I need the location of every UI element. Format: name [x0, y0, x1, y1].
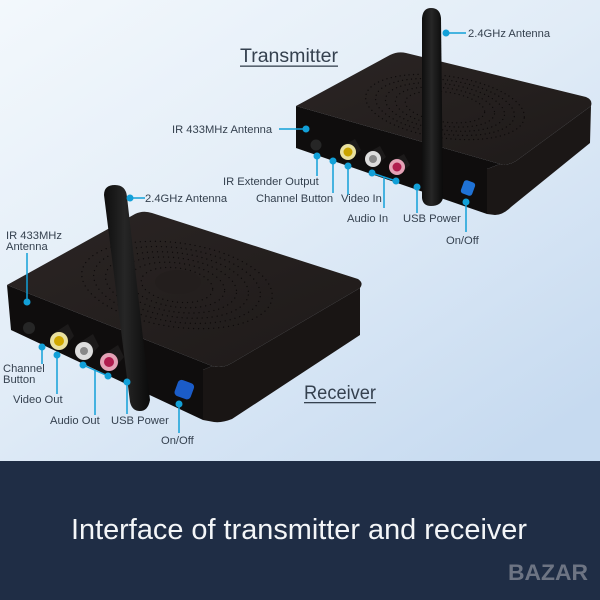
transmitter labels: IR Extender Output — [223, 176, 320, 188]
transmitter power switch — [460, 179, 476, 197]
transmitter labels — [172, 28, 551, 247]
heading: Transmitter: Transmitter — [240, 46, 339, 67]
receiver right face — [203, 288, 360, 422]
heading: Receiver: Receiver — [304, 383, 377, 404]
transmitter front face — [296, 106, 500, 214]
receiver yellow RCA — [50, 324, 74, 350]
receiver labels: On/Off — [161, 435, 195, 447]
receiver power switch — [173, 379, 195, 401]
receiver labels: Channel — [3, 363, 45, 375]
receiver labels — [3, 193, 228, 447]
transmitter speaker grille — [361, 65, 529, 149]
receiver device — [7, 185, 362, 422]
transmitter labels: Video In — [341, 193, 382, 205]
transmitter labels: On/Off — [446, 235, 480, 247]
receiver white RCA — [75, 334, 99, 360]
transmitter IR jack — [310, 140, 322, 150]
transmitter top face — [296, 52, 591, 165]
transmitter labels: IR 433MHz Antenna — [172, 124, 273, 136]
receiver IR jack — [23, 322, 35, 334]
receiver front face — [7, 285, 212, 420]
receiver labels: IR 433MHz — [6, 230, 62, 242]
transmitter labels: USB Power — [403, 213, 461, 225]
bottom banner — [0, 461, 600, 600]
transmitter antenna — [422, 8, 443, 206]
transmitter labels: Channel Button — [256, 193, 333, 205]
receiver labels: USB Power — [111, 415, 169, 427]
receiver labels: Antenna — [6, 241, 48, 253]
callout lines — [27, 33, 466, 433]
watermark: BAZAR — [508, 560, 588, 585]
receiver red RCA — [100, 345, 124, 371]
transmitter labels: 2.4GHz Antenna — [468, 28, 551, 40]
transmitter red RCA — [389, 154, 410, 175]
receiver antenna — [104, 185, 150, 411]
callout dots — [24, 30, 470, 408]
transmitter right face — [487, 106, 591, 215]
transmitter white RCA — [365, 146, 386, 167]
receiver labels: Audio Out — [50, 415, 101, 427]
transmitter device — [296, 8, 591, 215]
receiver labels: Button — [3, 374, 35, 386]
transmitter labels: Audio In — [347, 213, 388, 225]
background — [0, 0, 600, 461]
receiver labels: Video Out — [13, 394, 63, 406]
receiver speaker grille — [76, 230, 278, 340]
receiver centre disc — [155, 270, 201, 294]
banner caption: Interface of transmitter and receiver — [71, 514, 527, 546]
transmitter yellow RCA — [340, 139, 361, 160]
receiver labels: 2.4GHz Antenna — [145, 193, 228, 205]
receiver top face — [7, 212, 362, 367]
